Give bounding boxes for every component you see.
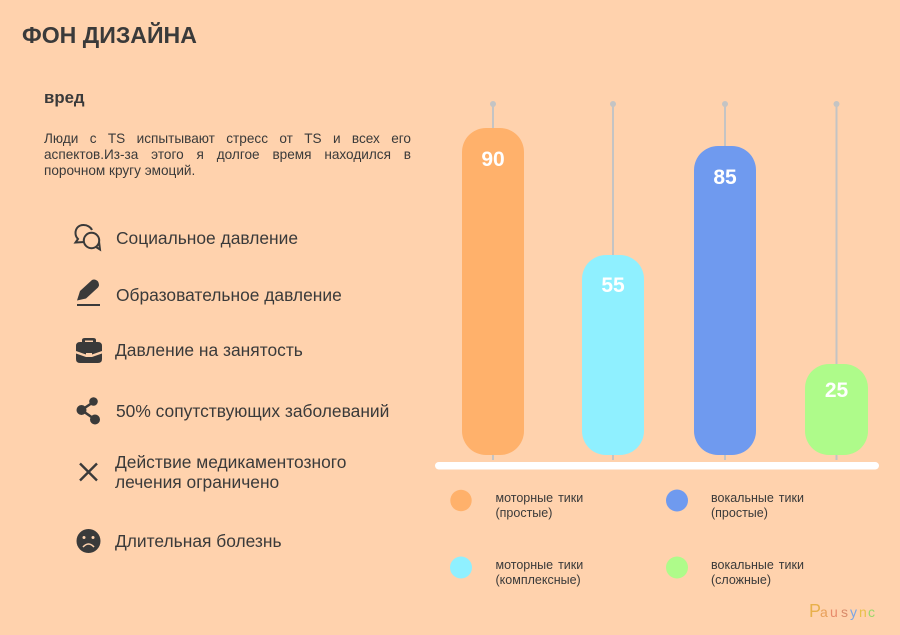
bar: vocal simple 85: 85 — [713, 166, 737, 189]
legend label: motor simple: (простые) — [496, 506, 552, 520]
intro paragraph — [44, 131, 411, 178]
logo: Pausync — [809, 601, 875, 621]
logo: Pausync: u — [830, 604, 838, 620]
list item: long illness: Длительная болезнь — [115, 530, 282, 550]
list item: educational pressure: Образовательное давление — [116, 284, 342, 304]
icon: sad face — [76, 529, 100, 553]
title: ФОН ДИЗАЙНА — [22, 22, 197, 48]
list item: employment pressure: Давление на занятость — [115, 340, 303, 360]
bar chart — [435, 101, 879, 470]
legend label: vocal simple: вокальные тики — [711, 490, 804, 504]
list item: social pressure: Социальное давление — [116, 228, 298, 248]
legend label: motor simple: моторные тики — [496, 490, 583, 504]
baseline — [435, 462, 879, 470]
legend label: motor simple — [496, 490, 583, 520]
logo: Pausync: n — [859, 604, 867, 620]
bar: motor simple 90 — [462, 128, 524, 455]
bar stem 3 — [722, 101, 728, 460]
legend label: motor complex: (комплексные) — [496, 572, 581, 586]
legend label: vocal simple — [711, 490, 804, 520]
legend swatch: motor complex — [450, 556, 472, 578]
logo: Pausync: c — [868, 604, 875, 620]
legend swatch: vocal complex — [666, 556, 688, 578]
bar stem 4 — [834, 101, 840, 460]
list item: limited medication effect: лечения ограничено — [115, 472, 279, 492]
bar: motor simple 90: 90 — [481, 148, 505, 171]
intro paragraph: Люди с TS испытывают стресс от TS и всех его — [44, 131, 411, 146]
legend label: vocal complex: вокальные тики — [711, 558, 804, 572]
logo: Pausync: a — [820, 604, 828, 620]
legend label: motor complex: моторные тики — [496, 558, 583, 572]
bar: vocal complex 25: 25 — [825, 379, 848, 402]
icon: speech bubbles — [76, 225, 100, 250]
bar stem 2 — [610, 101, 616, 460]
legend swatch: motor simple — [450, 490, 472, 511]
list item: comorbidities: 50% сопутствующих заболеваний — [116, 401, 389, 421]
list item: limited medication effect: Действие медикаментозного — [115, 452, 346, 472]
logo: Pausync: s — [841, 604, 848, 620]
icon: share — [76, 397, 100, 424]
icon: cross — [80, 464, 97, 480]
legend label: vocal simple: (простые) — [711, 506, 768, 520]
bar: motor complex 55 — [582, 255, 644, 455]
bar: vocal simple 85 — [694, 146, 756, 455]
intro paragraph: порочном кругу эмоций. — [44, 163, 195, 178]
legend label: vocal complex — [711, 558, 804, 586]
bar: motor complex 55: 55 — [601, 274, 625, 297]
subheading: harm: вред — [44, 88, 85, 106]
bar: vocal complex 25 — [805, 364, 868, 455]
bar stem 1 — [490, 101, 496, 460]
logo: Pausync: y — [850, 604, 857, 620]
icon: pencil — [77, 280, 100, 306]
legend label: vocal complex: (сложные) — [711, 572, 771, 586]
icon: briefcase — [76, 338, 102, 363]
legend label: motor complex — [496, 558, 583, 586]
list item: limited medication effect — [115, 452, 346, 492]
legend swatch: vocal simple — [666, 490, 688, 512]
logo: Pausync: P — [809, 601, 821, 621]
intro paragraph: аспектов.Из-за этого я долгое время находился в — [44, 147, 411, 162]
